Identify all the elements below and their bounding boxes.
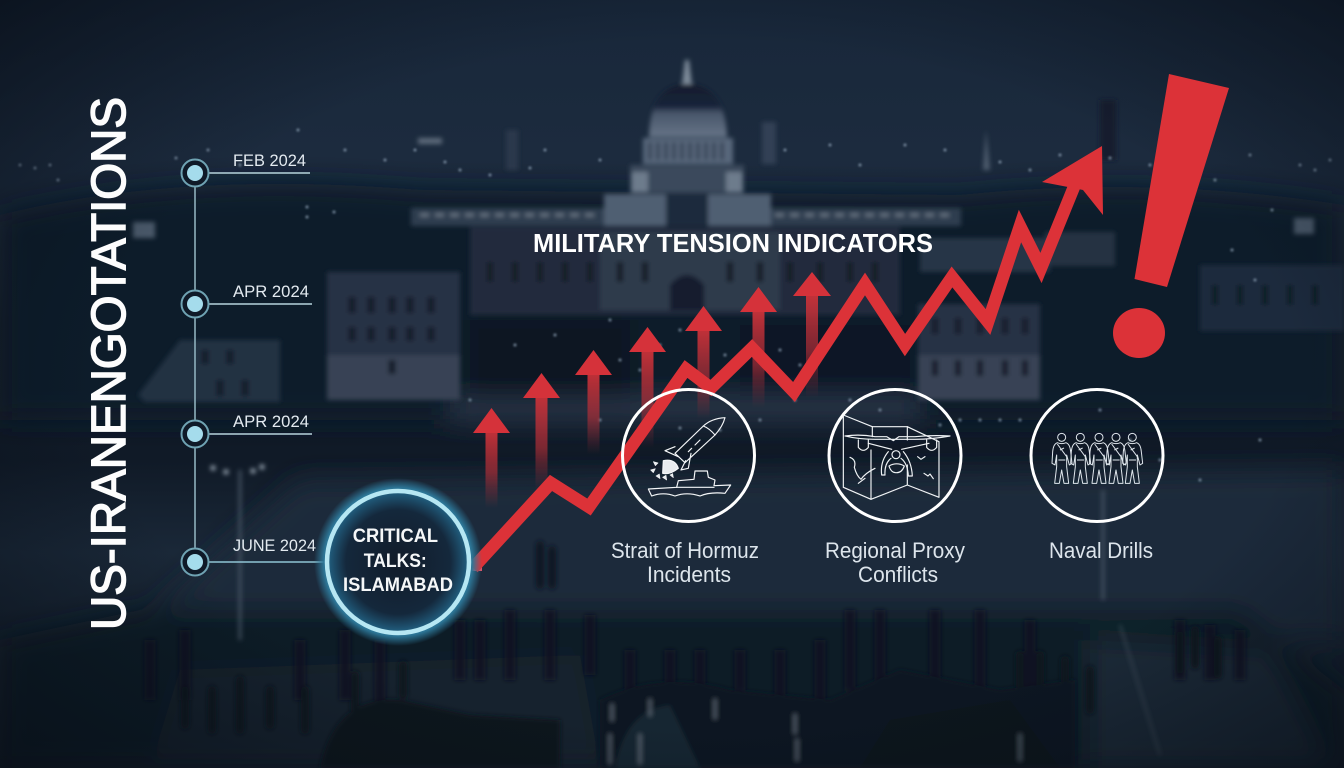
timeline event: Apr 2024 second: APR 2024 [233,412,309,431]
timeline event: June 2024 [182,536,330,576]
indicator: regional proxy conflicts [825,390,971,587]
timeline event: Apr 2024 second [182,412,312,448]
icon: missile and ship [648,418,731,496]
label: Incidents [647,562,731,587]
icon: drone over map [843,415,950,499]
icon: five soldiers [1052,433,1143,483]
side buildings [133,100,1344,402]
timeline event: Feb 2024: FEB 2024 [233,151,306,170]
timeline event: June 2024: JUNE 2024 [233,536,316,555]
title: vertical heading: US-IRANENGOTATIONS [83,97,136,630]
indicator: rising red arrows [473,272,831,508]
timeline [182,151,330,576]
label: Conflicts [858,562,938,587]
label: Naval Drills [1049,538,1153,563]
label: Regional Proxy [825,538,965,563]
arrowhead [1042,146,1103,215]
label: Strait of Hormuz [611,538,759,563]
timeline event: Apr 2024 [182,282,312,318]
callout: critical talks [314,478,482,646]
icon: exclamation mark [1113,74,1229,358]
chart: military tension trend line [462,146,1103,571]
timeline event: Feb 2024 [182,151,310,186]
callout: critical talks: TALKS: [364,550,427,572]
indicator: strait of hormuz [611,390,765,587]
timeline event: Apr 2024: APR 2024 [233,282,309,301]
capitol building [411,60,1115,315]
indicator: naval drills [1031,390,1163,563]
plaza silhouettes, vehicles and crowd [150,467,1240,768]
callout: critical talks: CRITICAL [353,525,438,547]
city lights [20,130,1330,480]
callout: critical talks: ISLAMABAD [343,574,453,596]
heading: military tension indicators: MILITARY TENSION INDICATORS [533,228,933,258]
